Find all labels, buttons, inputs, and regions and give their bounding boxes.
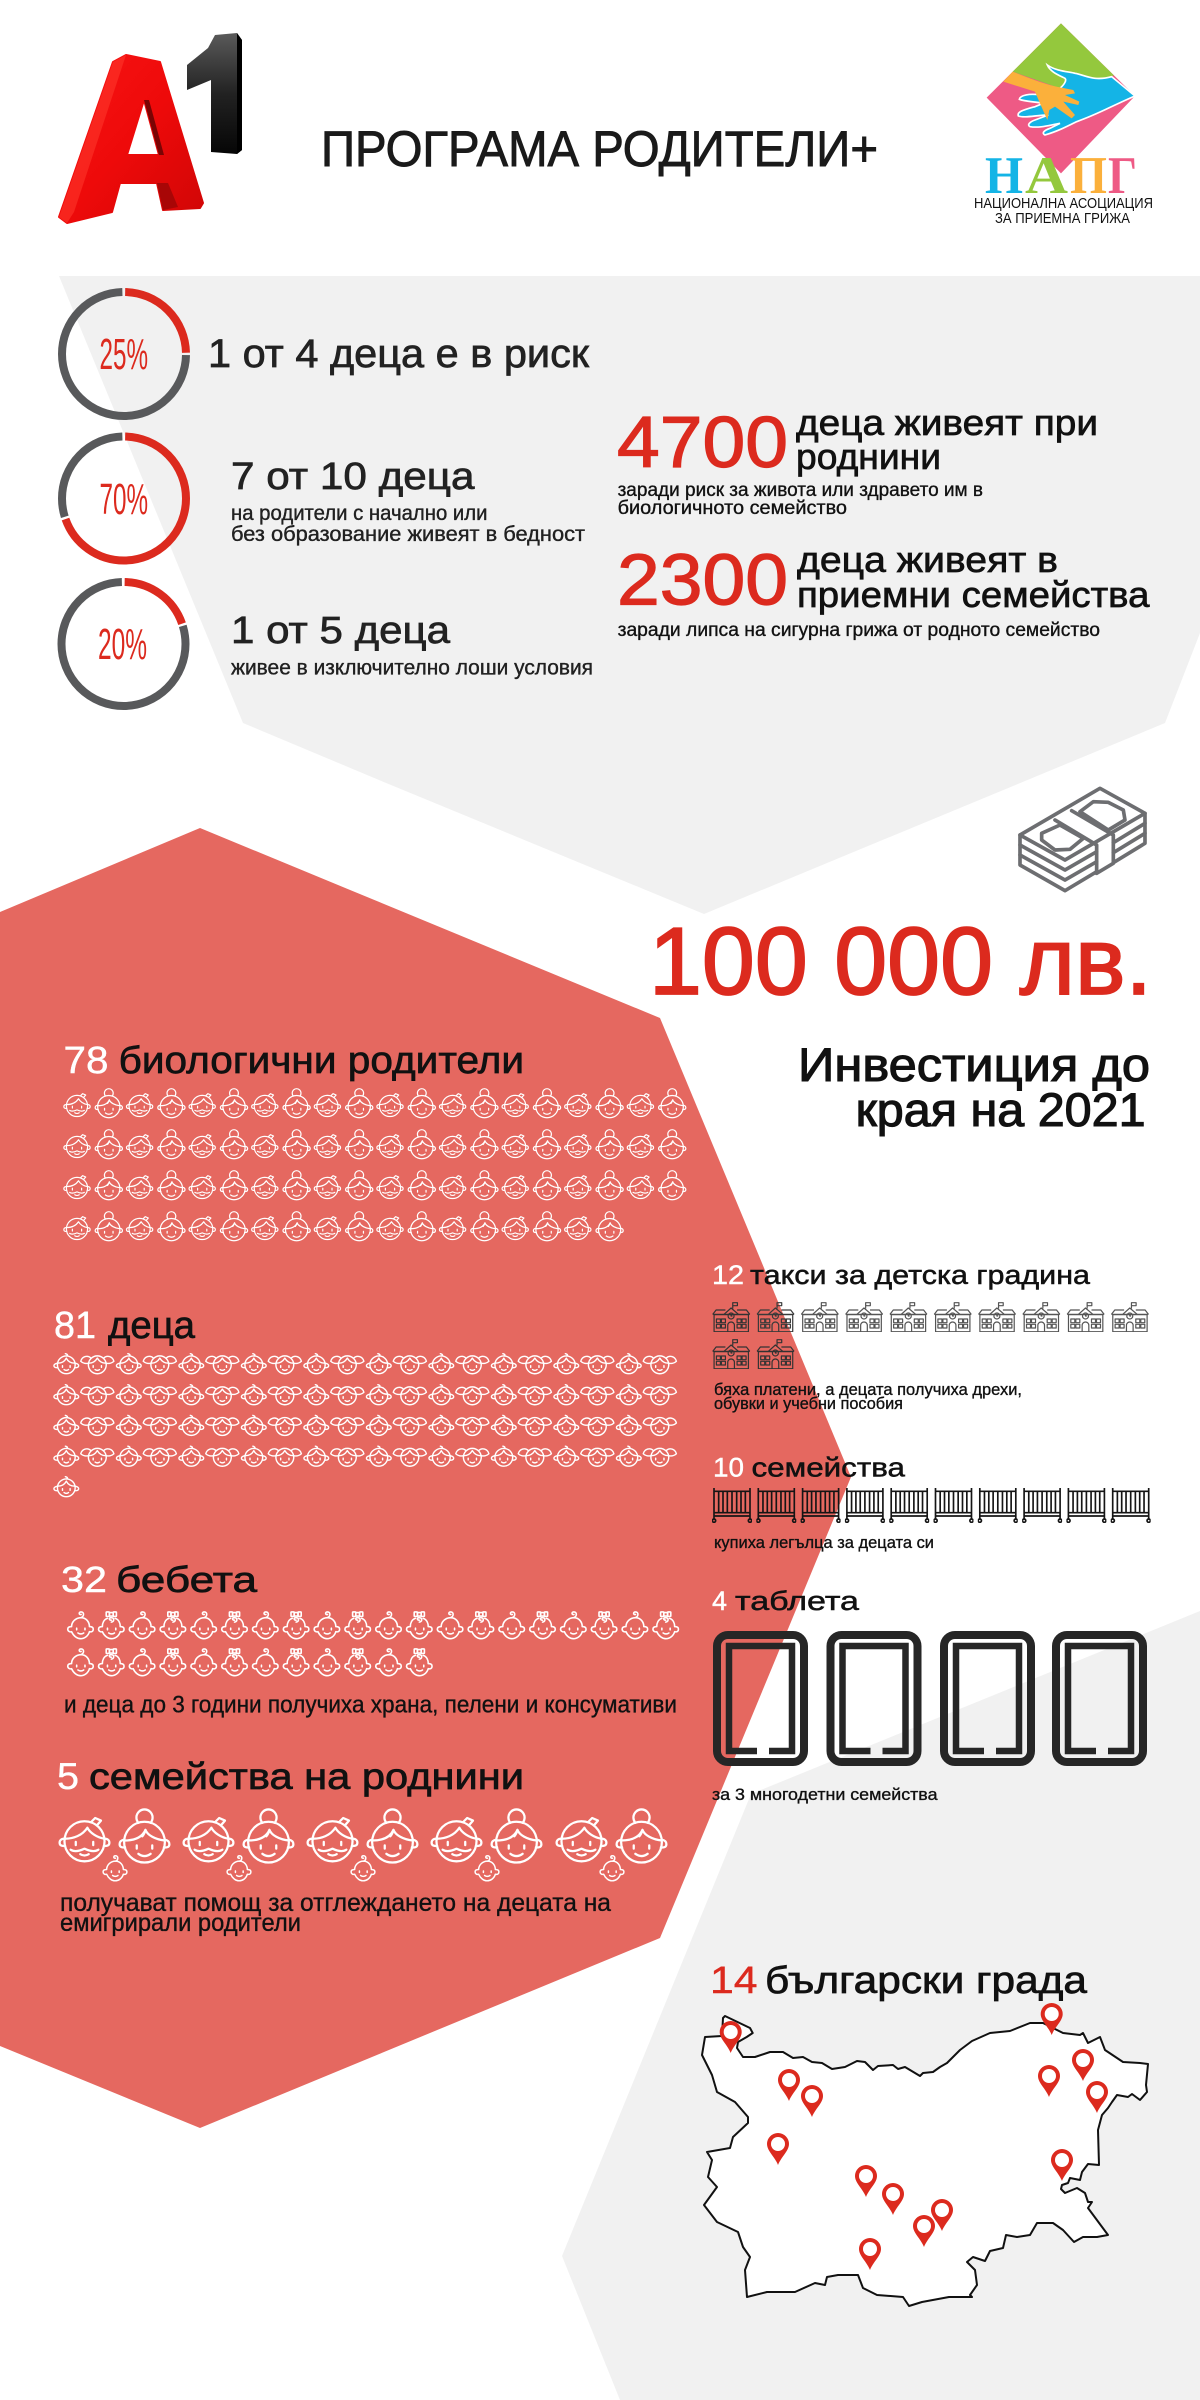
stat: 2300: приемни семейства <box>797 574 1151 615</box>
text: families description: емигрирали родители <box>60 1909 301 1937</box>
text block: investment until end of 2021 <box>798 1038 1150 1136</box>
text: families description <box>60 1889 611 1937</box>
logo: NAPG <box>974 23 1153 227</box>
icons: 5 families <box>60 1809 666 1881</box>
heading: 12 kindergarten fees: такси за детска градина <box>750 1260 1091 1290</box>
heading: 12 kindergarten fees: 12 <box>712 1260 744 1290</box>
heading: 14 Bulgarian towns: 14 <box>710 1960 758 2002</box>
logo: NAPG: НАЦИОНАЛНА АСОЦИАЦИЯ <box>974 195 1153 212</box>
donut: 70%: 70% <box>100 475 148 524</box>
text block: 7 in 10 <box>231 456 585 546</box>
logo: NAPG: А <box>1025 147 1068 205</box>
text block: 1 in 5: 1 от 5 деца <box>231 610 451 652</box>
donut: 25% <box>62 292 186 416</box>
heading: 5 relative families: семейства на роднини <box>89 1756 524 1797</box>
heading: 5 relative families: 5 <box>57 1756 79 1797</box>
text: tablets description: за 3 многодетни семейства <box>712 1785 938 1804</box>
icons: 10 cribs <box>712 1488 1150 1522</box>
text: cribs description: купиха легълца за децата си <box>714 1533 934 1552</box>
stat: 4700: биологичното семейство <box>618 498 847 519</box>
stat: 4700 <box>617 402 1098 519</box>
heading: 10 families: 10 <box>713 1452 744 1482</box>
panel: red hexagon <box>0 828 851 2128</box>
donut: 20%: 20% <box>98 620 147 669</box>
logo: NAPG: П <box>1070 147 1107 205</box>
heading: 10 families: семейства <box>752 1452 906 1482</box>
text block: investment until end of 2021: края на 2021 <box>856 1083 1146 1136</box>
stat: 4700: 4700 <box>617 403 788 483</box>
stat: 2300: 2300 <box>617 541 788 621</box>
icons: 32 babies <box>68 1612 678 1676</box>
logo: NAPG: Н <box>985 147 1023 205</box>
text block: 1 in 5: живее в изключително лоши условия <box>231 656 593 680</box>
icons: 81 children <box>54 1354 676 1497</box>
text: babies description: и деца до 3 години получиха храна, пелени и консумативи <box>64 1692 677 1719</box>
text: 1 in 4: 1 от 4 деца е в риск <box>208 332 590 376</box>
logo: NAPG: ЗА ПРИЕМНА ГРИЖА <box>995 210 1130 227</box>
text block: 1 in 5 <box>231 610 593 680</box>
heading: 78 biological parents: биологични родители <box>119 1040 524 1082</box>
logo: A1 <box>59 33 242 223</box>
heading: 78 biological parents: 78 <box>64 1040 108 1082</box>
text: kindergarten description: обувки и учебни пособия <box>714 1394 903 1413</box>
heading: 81 children <box>54 1305 196 1347</box>
text block: 7 in 10: 7 от 10 деца <box>231 456 475 498</box>
donut: 20% <box>62 582 186 706</box>
text block: 7 in 10: без образование живеят в бедност <box>231 523 585 546</box>
donut: 70% <box>62 436 186 560</box>
heading: 81 children: деца <box>108 1305 196 1347</box>
stat: 4700: заради риск за живота или здравето им в <box>618 480 983 501</box>
heading: 32 babies: 32 <box>61 1559 107 1600</box>
icon: money stack <box>1020 788 1145 891</box>
stat: 2300: заради липса на сигурна грижа от родното семейство <box>618 620 1100 641</box>
text: kindergarten description: бяха платени, а децата получиха дрехи, <box>714 1380 1022 1399</box>
text: kindergarten description <box>714 1380 1022 1413</box>
text: families description: получават помощ за отглеждането на децата на <box>60 1889 611 1917</box>
icons: 78 parents <box>64 1089 686 1241</box>
heading: 4 tablets: таблета <box>735 1586 860 1616</box>
heading: 14 Bulgarian towns: български града <box>765 1960 1088 2002</box>
heading: 4 tablets: 4 <box>712 1586 727 1616</box>
heading: 10 families <box>713 1452 906 1482</box>
text block: investment until end of 2021: Инвестиция до <box>798 1038 1150 1091</box>
donut: 25%: 25% <box>100 330 148 379</box>
heading: 32 babies: бебета <box>116 1559 258 1600</box>
stat: 2300 <box>617 539 1151 641</box>
stat: 2300: деца живеят в <box>797 539 1058 580</box>
stat: 4700: деца живеят при <box>796 402 1098 443</box>
stat: 4700: роднини <box>796 436 941 477</box>
text block: 7 in 10: на родители с начално или <box>231 502 488 525</box>
headline: investment amount: 100 000 лв. <box>649 908 1152 1015</box>
map: Bulgaria with pins <box>702 2003 1148 2306</box>
heading: 4 tablets <box>712 1586 860 1616</box>
heading: 32 babies <box>61 1559 258 1600</box>
background panel: top grey shape <box>59 276 1200 914</box>
icons: 12 kindergartens <box>713 1303 1148 1369</box>
background panel: bottom grey shape <box>562 1611 1200 2400</box>
heading: 81 children: 81 <box>54 1305 96 1347</box>
icons: 4 tablets <box>717 1635 1143 1762</box>
title: ПРОГРАМА РОДИТЕЛИ+ <box>321 121 878 177</box>
logo: NAPG: Г <box>1108 147 1137 205</box>
